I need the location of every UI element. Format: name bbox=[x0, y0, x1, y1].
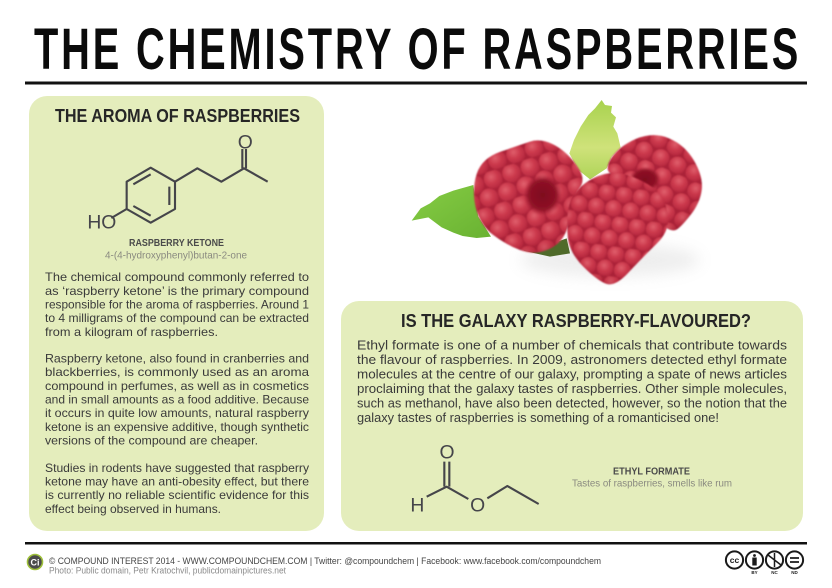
text block: ethyl formate description: Ethyl formate is one of a number of chemicals that contribute towards bbox=[357, 338, 787, 352]
text block: ethyl formate description: the flavour of raspberries. In 2009, astronomers detected ethyl formate bbox=[357, 353, 787, 367]
icon: left leaf bbox=[412, 185, 491, 238]
molecule: ethyl formate: O bbox=[470, 496, 485, 517]
icon: creative commons licence badges: cc bbox=[730, 555, 739, 565]
text block: uses of raspberry ketone: blackberries, is commonly used as an aroma bbox=[45, 365, 309, 379]
molecule caption: ethyl formate: ETHYL FORMATE bbox=[613, 466, 690, 478]
icon: front raspberry bbox=[567, 173, 668, 284]
text block: rodent studies: effect being observed in humans. bbox=[45, 502, 221, 516]
molecule caption: raspberry ketone: RASPBERRY KETONE bbox=[129, 238, 224, 249]
text block: ethyl formate description: galaxy tastes of raspberries is something of a romanticised one! bbox=[357, 411, 719, 425]
molecule caption: ethyl formate: Tastes of raspberries, smells like rum bbox=[572, 478, 732, 490]
icon: creative commons licence badges: NC bbox=[771, 570, 778, 575]
text block: ethyl formate description: such as methanol, have also been detected, however, so the notion that the bbox=[357, 396, 787, 410]
panel: the aroma of raspberries bbox=[29, 96, 324, 531]
text block: uses of raspberry ketone: versions of the compound are cheaper. bbox=[45, 434, 258, 448]
text block: uses of raspberry ketone: and in small amounts as a food additive. Because bbox=[45, 392, 309, 406]
text block: rodent studies bbox=[45, 461, 309, 516]
footer credits: Photo: Public domain, Petr Kratochvil, publicdomainpictures.net bbox=[49, 566, 286, 576]
molecule: raspberry ketone: HO bbox=[87, 212, 116, 233]
footer bbox=[28, 551, 803, 576]
icon: back right raspberry bbox=[608, 135, 702, 230]
molecule: ethyl formate: H bbox=[410, 496, 424, 517]
panel: is the galaxy raspberry-flavoured bbox=[341, 301, 803, 531]
icon: creative commons licence badges bbox=[726, 551, 803, 575]
molecule caption: raspberry ketone bbox=[105, 238, 247, 262]
text block: ethyl formate description: molecules at the centre of our galaxy, prompting a spate of news articles bbox=[357, 368, 787, 382]
text block: uses of raspberry ketone: compound in perfumes, as well as in cosmetics bbox=[45, 379, 309, 393]
heading: galaxy: IS THE GALAXY RASPBERRY-FLAVOURED? bbox=[401, 311, 751, 331]
text block: compound description bbox=[45, 270, 309, 339]
text block: compound description: The chemical compound commonly referred to bbox=[45, 270, 309, 284]
icon: left raspberry bbox=[474, 140, 583, 253]
molecule: ethyl formate bbox=[410, 443, 539, 517]
text block: uses of raspberry ketone: Raspberry ketone, also found in cranberries and bbox=[45, 352, 309, 366]
molecule caption: ethyl formate bbox=[572, 466, 732, 490]
text block: uses of raspberry ketone: it occurs in quite low amounts, natural raspberry bbox=[45, 406, 309, 420]
molecule: raspberry ketone: O bbox=[238, 132, 253, 153]
icon: compound interest logo bbox=[28, 554, 42, 570]
text block: uses of raspberry ketone bbox=[45, 352, 309, 448]
title: THE CHEMISTRY OF RASPBERRIES bbox=[34, 16, 798, 82]
icon: right leaf bbox=[569, 100, 621, 179]
text block: rodent studies: Studies in rodents have suggested that raspberry bbox=[45, 461, 309, 475]
text block: compound description: as ‘raspberry ketone’ is the primary compound bbox=[45, 284, 309, 298]
text block: rodent studies: is currently no reliable scientific evidence for this bbox=[45, 488, 309, 502]
text block: rodent studies: ketone may have an anti-obesity effect, but there bbox=[45, 474, 309, 488]
molecule caption: raspberry ketone: 4-(4-hydroxyphenyl)butan-2-one bbox=[105, 250, 247, 262]
text block: compound description: to 4 milligrams of the compound can be extracted bbox=[45, 311, 309, 325]
text block: compound description: responsible for the aroma of raspberries. Around 1 bbox=[45, 298, 309, 312]
icon: creative commons licence badges: BY bbox=[751, 570, 758, 575]
text block: uses of raspberry ketone: ketone is an expensive additive, though synthetic bbox=[45, 420, 309, 434]
text block: ethyl formate description: proclaiming that the galaxy tastes of raspberries. Other simple molecules, bbox=[357, 382, 787, 396]
text block: ethyl formate description bbox=[357, 338, 787, 425]
icon: creative commons licence badges: ND bbox=[791, 570, 798, 575]
molecule: ethyl formate: O bbox=[439, 443, 455, 464]
footer credits bbox=[49, 556, 601, 576]
text block: compound description: from a kilogram of raspberries. bbox=[45, 325, 218, 339]
icon: compound interest logo: Ci bbox=[30, 558, 40, 568]
illustration: raspberries photo bbox=[412, 100, 702, 284]
heading: aroma: THE AROMA OF RASPBERRIES bbox=[55, 106, 300, 126]
footer credits: © COMPOUND INTEREST 2014 - WWW.COMPOUNDCHEM.COM | Twitter: @compoundchem | Facebook: www.facebook.com/compoundchem bbox=[49, 556, 601, 566]
molecule: raspberry ketone bbox=[87, 132, 268, 233]
